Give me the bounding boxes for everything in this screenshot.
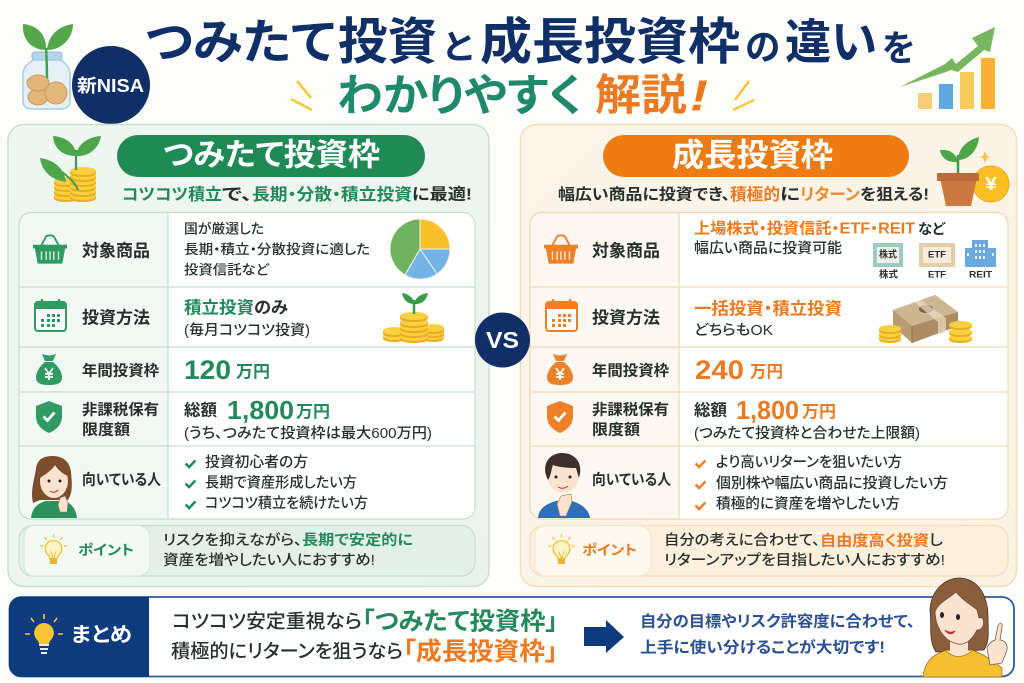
row: 非課税保有限度額: (うち、つみたて投資枠は最大600万円): [184, 425, 432, 442]
icons: 株式 / ETF / REIT: ETF: [928, 270, 946, 280]
row: 対象商品: 投資信託など: [184, 262, 270, 278]
title: わかりやすく: [337, 72, 582, 120]
tagline: リターン: [800, 185, 860, 204]
row: 非課税保有限度額: 1,800: [227, 395, 294, 425]
tagline: 幅広い商品に投資でき、: [558, 184, 730, 204]
row: 非課税保有限度額: [547, 395, 920, 442]
icon: potted sprout with yen coin: ¥: [985, 174, 997, 194]
row: 向いている人: 向いている人: [82, 472, 161, 488]
callout: ポイント: し: [929, 533, 944, 549]
icons: 株式 / ETF / REIT: 株式: [879, 248, 897, 260]
tagline: [558, 184, 929, 204]
tagline: 長期・分散・積立投資: [252, 184, 412, 204]
row: 向いている人: コツコツ積立を続けたい方: [205, 494, 368, 512]
row: 投資方法: [35, 298, 310, 339]
row: 対象商品: 長期・積立・分散投資に適した: [184, 241, 370, 257]
tagline: コツコツ積立: [122, 185, 222, 204]
title: と: [443, 29, 473, 67]
row: 対象商品: 上場株式・投資信託・ETF・REIT: [694, 218, 916, 238]
panel: 成長投資枠: [520, 124, 1016, 586]
heading pill: つみたて投資枠: [163, 138, 380, 172]
row: 非課税保有限度額: 万円: [802, 402, 836, 422]
icon: coin stack and sprout: [383, 293, 444, 343]
row: 向いている人: [31, 454, 368, 518]
illustration: woman: [31, 456, 77, 518]
row: 非課税保有限度額: 限度額: [592, 420, 640, 438]
row: 投資方法: [546, 299, 842, 339]
decoration: yellow sparks left: [291, 81, 312, 110]
row: 対象商品: 国が厳選した: [184, 220, 264, 236]
decoration: yellow sparks right: [733, 81, 754, 110]
icons: 株式 / ETF / REIT: REIT: [969, 270, 992, 280]
row: 年間投資枠: 120: [184, 355, 231, 385]
title: つみたて: [145, 16, 335, 70]
chart: pie: [390, 219, 450, 279]
tagline: に最適!: [412, 184, 472, 204]
row: 対象商品: [33, 220, 370, 278]
panel: つみたて投資枠: [8, 124, 489, 586]
row: 非課税保有限度額: [36, 395, 432, 442]
row: 非課税保有限度額: 非課税保有: [82, 402, 159, 418]
icons: 株式 / ETF / REIT: 株式: [879, 268, 898, 280]
row: 非課税保有限度額: 非課税保有: [592, 402, 669, 418]
icon: coins and sprout: [40, 136, 101, 202]
row: 年間投資枠: 年間投資枠: [82, 362, 159, 380]
comparison table: [19, 212, 475, 519]
title: [145, 14, 915, 120]
summary lines: 「成長投資枠」: [403, 638, 558, 666]
arrow: [584, 620, 624, 653]
badge: VS: VS: [486, 327, 519, 353]
row: 投資方法: 投資方法: [82, 308, 150, 328]
icons: 株式 / ETF / REIT: [873, 240, 996, 280]
row: 向いている人: 長期で資産形成したい方: [205, 474, 357, 492]
badge: VS: [475, 312, 530, 368]
row: 年間投資枠: 年間投資枠: [592, 362, 669, 380]
row: 非課税保有限度額: 1,800: [736, 395, 799, 425]
summary lines: 積極的にリターンを狙うなら: [171, 640, 403, 662]
row: 投資方法: のみ: [254, 299, 288, 317]
row: 向いている人: [538, 453, 948, 518]
tagline: を狙える!: [860, 186, 929, 204]
closing message: 上手に使い分けることが大切です!: [640, 638, 885, 656]
icon: potted sprout with yen coin: [937, 137, 1009, 206]
row: 投資方法: 積立投資: [184, 298, 254, 318]
row: 非課税保有限度額: 限度額: [82, 420, 130, 438]
comparison table: [530, 212, 1008, 519]
icon: banknote stack with coins: [879, 295, 972, 343]
callout: ポイント: リターンアップを目指したい人におすすめ!: [664, 552, 945, 569]
callout: ポイント: [19, 526, 475, 576]
title: 成長投資枠: [480, 14, 740, 70]
summary lines: [171, 608, 558, 666]
callout: ポイント: 長期で安定的に: [302, 531, 413, 549]
heading pill: [603, 135, 909, 177]
row: 非課税保有限度額: (つみたて投資枠と合わせた上限額): [694, 425, 920, 442]
title: 違い: [785, 16, 877, 70]
heading pill: [117, 135, 425, 177]
title: !: [690, 72, 708, 120]
tagline: 積極的: [730, 185, 780, 204]
panel background: [520, 124, 1016, 586]
closing message: [640, 612, 915, 656]
row: 向いている人: 投資初心者の方: [205, 454, 308, 471]
panel: まとめ: [9, 597, 1014, 677]
row: 年間投資枠: [36, 354, 270, 385]
row: 投資方法: 一括投資・積立投資: [694, 300, 842, 318]
icon: rising bar chart with arrow: [900, 27, 995, 109]
tagline: [122, 184, 472, 204]
title: 投資: [338, 14, 437, 70]
row: 非課税保有限度額: 万円: [296, 402, 330, 422]
heading block: まとめ: [71, 624, 132, 646]
row: 非課税保有限度額: 総額: [694, 402, 727, 420]
row: 年間投資枠: 万円: [750, 362, 783, 382]
callout: ポイント: リスクを抑えながら、: [163, 531, 302, 549]
title: の: [745, 26, 780, 68]
icon: jar with coins and sprout: [23, 24, 73, 109]
title: を: [882, 28, 915, 68]
summary frame: [10, 597, 1014, 676]
icons: 株式 / ETF / REIT: ETF: [928, 250, 946, 260]
row: 対象商品: [544, 218, 946, 264]
badge: 新NISA: [72, 46, 150, 124]
illustration: man: [538, 453, 590, 518]
panel background: [8, 124, 489, 586]
heading pill: 成長投資枠: [672, 137, 833, 173]
row: 投資方法: 投資方法: [592, 308, 660, 328]
row: 年間投資枠: [547, 354, 783, 385]
row: 対象商品: など: [918, 221, 946, 237]
illustration: woman pointing: [923, 578, 1007, 677]
row: 非課税保有限度額: 総額: [184, 402, 217, 420]
title: 解説: [595, 72, 687, 120]
summary lines: 「つみたて投資枠」: [362, 608, 558, 636]
row: 向いている人: 向いている人: [592, 472, 671, 488]
callout: ポイント: 資産を増やしたい人におすすめ!: [163, 551, 375, 569]
tagline: に: [780, 186, 800, 204]
callout: ポイント: 自分の考えに合わせて、: [664, 532, 820, 549]
badge: 新NISA: 新NISA: [77, 76, 144, 96]
tagline: で、: [222, 186, 252, 204]
row: 対象商品: 対象商品: [82, 240, 150, 260]
callout: ポイント: ポイント: [78, 542, 134, 558]
row: 向いている人: より高いリターンを狙いたい方: [716, 454, 902, 471]
row: 年間投資枠: 万円: [236, 362, 270, 382]
callout: ポイント: ポイント: [582, 542, 637, 558]
row: 対象商品: 対象商品: [592, 240, 660, 260]
closing message: 自分の目標やリスク許容度に合わせて、: [640, 612, 915, 630]
summary lines: コツコツ安定重視なら: [172, 610, 362, 632]
row: 投資方法: (毎月コツコツ投資): [184, 322, 310, 339]
row: 対象商品: 幅広い商品に投資可能: [694, 240, 843, 257]
callout: ポイント: [530, 526, 1008, 576]
callout: ポイント: 自由度高く投資: [820, 532, 929, 550]
row: 向いている人: 個別株や幅広い商品に投資したい方: [716, 475, 948, 492]
row: 投資方法: どちらもOK: [694, 322, 773, 339]
row: 年間投資枠: 240: [695, 355, 744, 385]
heading block: [9, 597, 149, 677]
row: 向いている人: 積極的に資産を増やしたい方: [716, 494, 900, 512]
